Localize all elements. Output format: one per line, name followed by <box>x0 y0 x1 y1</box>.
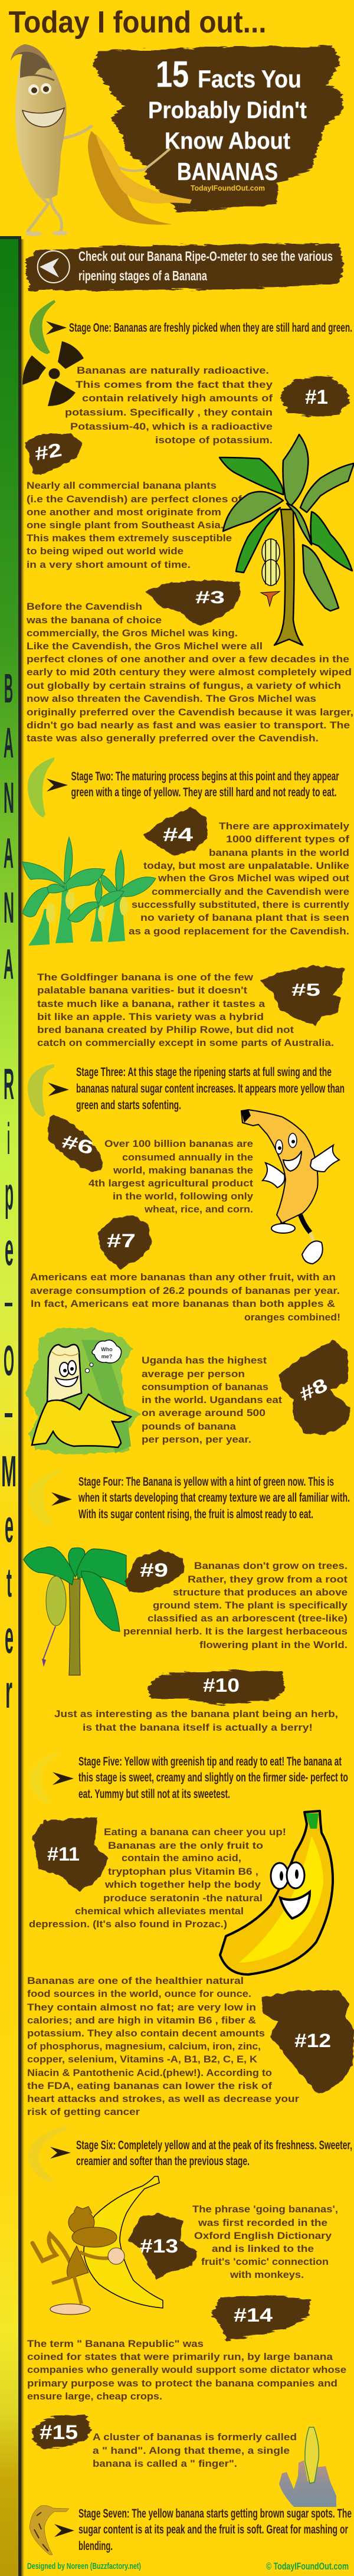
sidebar: banana ripe-o-meter: N <box>4 773 14 822</box>
flower stem <box>43 1626 55 1660</box>
fact 3 text: originally preferred over the Cavendish because it was larger, <box>27 707 353 718</box>
badge #14 <box>211 2295 310 2340</box>
brush panel: headline <box>93 46 343 213</box>
badge #14: #14 <box>234 2304 273 2326</box>
badge #10: #10 <box>203 1675 240 1696</box>
fact 3 text: out globally by certain strains of fungus, a variety of which <box>27 680 341 691</box>
fact 3 text: didn't go bad nearly as fast and was easier to transport. The <box>27 720 350 731</box>
stage one <box>30 300 352 354</box>
headline text: 15 <box>156 54 189 95</box>
stage text <box>76 1065 345 1112</box>
headline text: BANANAS <box>177 158 278 185</box>
shoes <box>271 1224 295 1233</box>
fact 3 text: commercially, the Gros Michel was king. <box>27 627 238 639</box>
trunks <box>28 909 50 946</box>
fact 3 text: now also threaten the Cavendish. The Gros Michel was <box>27 693 316 704</box>
badge #1: #1 <box>305 386 328 408</box>
fact 4 text: commercially and the Cavendish were <box>152 886 349 897</box>
fact 5 text: The Goldfinger banana is one of the few <box>37 972 254 983</box>
headline text: Facts You <box>198 65 301 93</box>
fact 6 text: consumed annually in the <box>122 1152 253 1163</box>
sidebar: banana ripe-o-meter: R <box>4 1060 14 1109</box>
illustration: peeled banana man <box>11 44 192 236</box>
fact 9 text: classified as an arborescent (tree-like) <box>148 1613 348 1624</box>
monkey foot <box>50 2304 90 2315</box>
banana <box>84 2176 163 2308</box>
fact 3 text: perfect clones of one another and over a few decades in the <box>27 653 349 665</box>
illustration: banana plant <box>219 434 354 645</box>
fact 3 text: taste was also generally preferred over the Cavendish. <box>27 733 319 744</box>
limbs <box>25 126 169 233</box>
stage seven <box>30 2505 352 2555</box>
fact 8 text: Uganda has the highest <box>142 1355 267 1366</box>
highlight <box>239 1836 323 1963</box>
badge #8: #8 <box>296 1374 330 1405</box>
fact 14 text: ensure large, cheap crops. <box>27 2391 162 2402</box>
fact 15 text: a " hand". Along that theme, a single <box>93 2445 290 2456</box>
fact 2 text: in a very short amount of time. <box>27 559 191 570</box>
fact 12 text <box>27 1975 299 2117</box>
fact 11 text: Bananas are the only fruit to <box>108 1840 263 1851</box>
icon: ripe banana <box>30 1751 58 1803</box>
icon: light green banana <box>28 757 54 818</box>
arrow <box>51 1492 72 1506</box>
fact 9 text: flowering plant in the World. <box>199 1639 348 1650</box>
fact 8 text: average per person <box>142 1368 245 1379</box>
fact 13 text: and is linked to the <box>212 2243 314 2254</box>
fact 11 text: which together help the body <box>104 1879 261 1890</box>
illustration: dancing cartoon banana <box>241 1110 339 1264</box>
badge #2: #2 <box>33 439 64 465</box>
face <box>276 1133 301 1171</box>
fact 13 text <box>192 2204 338 2280</box>
thought bubble: me? <box>101 1354 112 1359</box>
flower <box>261 591 280 606</box>
footer credit: Designed by Noreen (Buzzfactory.net) <box>27 2561 141 2571</box>
illustration: peeled banana "Who me?" <box>26 1328 140 1455</box>
monkey hand <box>108 2248 124 2264</box>
fact 14 text <box>27 2338 346 2402</box>
fact 4 text: today, but most are unpalatable. Unlike <box>143 860 349 871</box>
fact 14 text: primary purpose was to protect the banana companies and <box>27 2378 337 2389</box>
sidebar: banana ripe-o-meter: r <box>5 1665 12 1718</box>
fact 11 text <box>29 1826 286 1930</box>
body <box>241 1110 318 1223</box>
badge #11: #11 <box>47 1843 80 1865</box>
badge #3: #3 <box>195 588 225 607</box>
fact 14 text: companies who generally would support some dictator whose <box>27 2364 346 2375</box>
fact 11 text: produce seratonin -the natural <box>103 1892 263 1904</box>
fact 9 text: structure that produces an above <box>173 1587 348 1598</box>
fact 7 text: In fact, Americans eat more bananas than both apples & <box>31 1298 335 1309</box>
fact 12 text: They contain almost no fat; are very low in <box>27 2002 256 2013</box>
thought bubble <box>85 1340 122 1373</box>
stage text <box>71 770 339 799</box>
icon: spotted banana <box>30 2505 69 2555</box>
badge #1 <box>281 377 349 417</box>
fact 14 text: coined for states that were primarily run, by large banana <box>27 2351 333 2362</box>
stage text <box>78 1475 350 1521</box>
banner text <box>78 249 333 283</box>
fact 13 text: with monkeys. <box>230 2269 304 2280</box>
fact 8 text: pounds of banana <box>142 1421 237 1432</box>
fact 13 text: was first recorded in the <box>198 2217 327 2228</box>
fact 2 text <box>27 480 242 570</box>
face <box>21 75 64 127</box>
fact 12 text: the FDA, eating bananas can lower the risk of <box>27 2080 272 2091</box>
fact 10 text: is that the banana itself is actually a berry! <box>83 1722 313 1733</box>
monkey tail <box>32 2234 72 2267</box>
sidebar: banana ripe-o-meter: p <box>5 1168 14 1220</box>
banana bunch <box>46 1576 66 1626</box>
fact 12 text: risk of getting cancer <box>27 2106 140 2117</box>
fact 7 text: Americans eat more bananas than any other fruit, with an <box>30 1271 336 1283</box>
fact 13 text: fruit's 'comic' connection <box>201 2256 329 2267</box>
icon: circled arrow <box>38 251 70 283</box>
sidebar: banana ripe-o-meter: A <box>4 720 14 767</box>
fact 5 text: bit like an apple. This variety was a hybrid <box>37 1011 264 1022</box>
banana bunches <box>46 891 128 923</box>
fronds <box>24 1547 126 1632</box>
banana flesh <box>47 1345 81 1405</box>
badge #9: #9 <box>140 1560 168 1581</box>
fact 6 text <box>88 1138 254 1215</box>
badge #5: #5 <box>291 980 320 1000</box>
fact 9 text <box>123 1560 348 1650</box>
brush stroke background <box>25 243 344 290</box>
headline text: Know About <box>165 128 290 154</box>
badge #7 <box>97 1215 151 1269</box>
fact 3 text: early to mid 20th century they were almost completely wiped <box>27 666 352 678</box>
fact 12 text: Niacin & Pantothenic Acid.(phew!). According to <box>27 2067 272 2078</box>
sidebar: banana ripe-o-meter: N <box>4 883 14 932</box>
fact 10 text <box>54 1708 338 1733</box>
fact 8 text: on average around 500 <box>142 1407 266 1418</box>
fact 4 text: 1000 different types of <box>226 833 349 845</box>
sidebar: banana ripe-o-meter: e <box>5 1611 14 1663</box>
fact 4 text: no variety of banana plant that is seen <box>140 912 349 923</box>
stage text <box>76 2139 352 2168</box>
fact 12 text: calories; and are high in vitamin B6 , fiber & <box>27 2015 256 2026</box>
fact 8 text: per person, per year. <box>142 1434 251 1445</box>
banner: ripe-o-meter intro <box>25 243 344 290</box>
fact 4 text: There are approximately <box>219 820 350 832</box>
icon: yellow-green banana <box>28 1064 54 1117</box>
fact 7 text: oranges combined! <box>244 1312 340 1323</box>
fact 5 text <box>37 972 334 1048</box>
fact 15 text: banana is called a " finger". <box>93 2458 237 2469</box>
badge #6 <box>47 1115 103 1171</box>
fact 10 text: Just as interesting as the banana plant being an herb, <box>54 1708 338 1719</box>
stage five <box>30 1751 348 1803</box>
fact 12 text: potassium. They also contain decent amounts <box>27 2028 265 2039</box>
fact 12 text: heart attacks and strokes, as well as decrease your <box>27 2093 299 2104</box>
sidebar: banana ripe-o-meter: O <box>4 1338 14 1385</box>
fact 1 text <box>65 365 273 446</box>
fact 12 text: of phosphorus, magnesium, calcium, iron, zinc, <box>27 2041 261 2052</box>
fact 12 text: food sources in the world, ounce for ounce. <box>27 1988 251 1999</box>
fact 1 text: Bananas are naturally radioactive. <box>77 365 269 376</box>
headline text: TodayIFoundOut.com <box>191 184 265 192</box>
body <box>220 1811 333 1975</box>
fact 8 text: in the world. Ugandans eat <box>142 1394 282 1405</box>
stage text: blending. <box>78 2539 113 2553</box>
fact 2 text: (i.e the Cavendish) are perfect clones of <box>27 493 242 505</box>
fact 2 text: to being wiped out world wide <box>27 545 183 557</box>
green splash background <box>26 1328 140 1455</box>
fact 3 text: Like the Cavendish, the Gros Michel were all <box>27 640 263 652</box>
icon: green banana <box>30 300 55 354</box>
banner text: ripening stages of a Banana <box>78 268 207 283</box>
illustration: monkey hugging banana <box>32 2176 163 2315</box>
headline text: Probably Didn't <box>148 97 307 123</box>
stage six <box>28 2125 352 2182</box>
icon: radiation symbol <box>22 341 84 406</box>
trunk <box>69 1579 80 1675</box>
fact 11 text: tryptophan plus Vitamin B6 , <box>108 1866 258 1877</box>
arrow <box>48 1083 69 1096</box>
legs <box>282 1215 310 1233</box>
badge #15 <box>32 2415 91 2450</box>
fact 5 text: bred banana created by Philip Rowe, but did not <box>37 1024 294 1035</box>
fact 11 text: Eating a banana can cheer you up! <box>104 1826 286 1838</box>
fact 1 text: isotope of potassium. <box>155 434 273 446</box>
fact 4 text: as a good replacement for the Cavendish. <box>129 926 349 937</box>
title: Today I found out: Today I found out... <box>8 5 267 40</box>
fact 15 text: A cluster of bananas is formerly called <box>93 2431 297 2443</box>
fact 7 text <box>30 1271 340 1323</box>
stage three <box>28 1064 345 1117</box>
face <box>271 1862 310 1918</box>
badge #12: #12 <box>294 2030 331 2051</box>
fact 2 text: one single plant from Southeast Asia. <box>27 519 224 531</box>
fact 9 text: ground stem. The plant is specifically <box>153 1600 348 1611</box>
badge #6: #6 <box>60 1130 96 1159</box>
arrow <box>47 779 68 792</box>
sidebar: banana ripe-o-meter: M <box>1 1447 17 1496</box>
fact 8 text <box>142 1355 282 1445</box>
fact 13 text: Oxford English Dictionary <box>194 2230 332 2241</box>
illustration: banana trees <box>22 837 156 946</box>
badge #8 <box>278 1340 351 1434</box>
fact 2 text: This makes them extremely susceptible <box>27 532 232 544</box>
fact 4 text: banana plants in the world <box>209 847 349 858</box>
stage text <box>78 2507 352 2553</box>
fact 8 text: consumption of bananas <box>142 1381 268 1392</box>
sidebar: banana ripe-o-meter: t <box>6 1560 12 1606</box>
sidebar: banana ripe-o-meter: A <box>4 830 14 877</box>
badge #12 <box>261 1990 354 2094</box>
fact 3 text: was the banana of choice <box>26 614 162 626</box>
stage two <box>28 757 339 818</box>
face <box>55 1361 78 1387</box>
banana peel <box>32 1394 131 1447</box>
monkey head <box>68 2206 117 2247</box>
badge #4: #4 <box>163 824 193 845</box>
sidebar: banana ripe-o-meter: e <box>5 1223 14 1275</box>
fact 9 text: Bananas don't grow on trees. <box>194 1560 348 1571</box>
fact 4 text: successfully substituted, there is currently <box>132 899 350 910</box>
banana bunch <box>262 539 280 586</box>
badge #15: #15 <box>40 2421 78 2444</box>
stage four <box>28 1470 350 1526</box>
fact 3 text: Before the Cavendish <box>27 601 142 612</box>
icon: yellow banana <box>28 1470 60 1526</box>
stage text: eat. Yummy but still not at its sweetest. <box>78 1787 230 1801</box>
fact 6 text: world, making bananas the <box>113 1165 253 1176</box>
fact 12 text: Bananas are one of the healthier natural <box>27 1975 244 1986</box>
headline text <box>148 54 307 192</box>
fact 4 text: when the Gros Michel was wiped out <box>158 872 349 884</box>
sidebar: banana ripe-o-meter: e <box>5 1500 14 1552</box>
leaves <box>219 434 354 611</box>
arrow <box>46 321 67 335</box>
illustration: hand holding banana finger <box>279 2427 336 2507</box>
brush stroke background <box>93 46 343 213</box>
fact 11 text: depression. (It's also found in Prozac.) <box>29 1918 227 1930</box>
fact 4 text <box>129 820 350 937</box>
badge #10 <box>148 1671 284 1705</box>
fact 5 text: taste much like a banana, rather it tastes a <box>37 998 266 1009</box>
fact 12 text: copper, selenium, Vitamins -A, B1, B2, C, E, K <box>27 2054 258 2065</box>
stage text <box>78 1755 348 1801</box>
badge #3 <box>146 581 241 626</box>
fact 3 text <box>26 601 353 744</box>
hands <box>310 1145 339 1172</box>
fact 1 text: contain relatively high amounts of <box>82 393 273 404</box>
illustration: banana plant with bunch <box>24 1547 126 1675</box>
fact 11 text: chemical which alleviates mental <box>75 1905 244 1917</box>
fact 6 text: Over 100 billion bananas are <box>104 1138 253 1149</box>
fact 2 text: Nearly all commercial banana plants <box>27 480 217 491</box>
fronds <box>22 837 156 922</box>
fact 6 text: in the world, following only <box>113 1191 254 1202</box>
fact 6 text: wheat, rice, and corn. <box>144 1204 253 1215</box>
peel <box>88 131 172 225</box>
icon: fully yellow banana <box>28 2125 67 2182</box>
fact 9 text: Rather, they grow from a root <box>188 1574 348 1585</box>
badge #5 <box>260 966 344 1026</box>
sidebar: banana ripe-o-meter: B <box>4 665 13 711</box>
badge #11 <box>32 1817 107 1892</box>
fact 1 text: This comes from the fact that they <box>76 379 273 390</box>
monkey body <box>67 2246 88 2278</box>
badge #7: #7 <box>107 1230 136 1251</box>
fact 15 text <box>93 2431 297 2469</box>
stage text: creamier and softer than the previous stage. <box>76 2155 250 2168</box>
fact 9 text: perennial herb. It is the largest herbaceous <box>123 1626 348 1637</box>
badge #13 <box>129 2214 198 2280</box>
thought bubble: Who <box>101 1346 113 1352</box>
stem <box>306 1813 319 1829</box>
badge #4 <box>143 808 208 856</box>
badge #9 <box>125 1549 184 1593</box>
banana finger <box>305 2427 319 2483</box>
badge #13: #13 <box>140 2235 178 2257</box>
sidebar: banana ripe-o-meter: A <box>4 941 14 988</box>
fact 6 text: 4th largest agricultural product <box>88 1178 253 1189</box>
fact 11 text: contain the amino acid, <box>122 1852 241 1864</box>
fact 5 text: catch on commercially except in some parts of Australia. <box>37 1037 334 1048</box>
fact 1 text: potassium. Specifically , they contain <box>65 407 273 418</box>
fact 7 text: average consumption of 26.2 pounds of bananas per year. <box>30 1285 340 1296</box>
fact 5 text: palatable banana varities- but it doesn't <box>37 985 247 996</box>
arrow <box>53 1772 74 1785</box>
fact 13 text: The phrase 'going bananas', <box>192 2204 338 2215</box>
hand <box>279 2460 336 2507</box>
banana body <box>15 54 67 198</box>
arrow <box>50 2147 71 2159</box>
banana cap <box>11 44 52 78</box>
fact 1 text: Potassium-40, which is a radioactive <box>70 421 273 432</box>
fact 2 text: one another and most originate from <box>27 506 221 518</box>
fact 14 text: The term " Banana Republic" was <box>27 2338 204 2349</box>
badge #2 <box>25 434 83 475</box>
illustration: big smiling banana <box>220 1811 333 1975</box>
sidebar: banana ripe-o-meter <box>0 236 24 2576</box>
feet <box>25 231 42 236</box>
stage text: green and starts sofenting. <box>76 1099 181 1112</box>
trunk <box>274 509 303 645</box>
arrow <box>54 2524 74 2537</box>
sidebar: banana ripe-o-meter: i <box>7 1114 10 1163</box>
